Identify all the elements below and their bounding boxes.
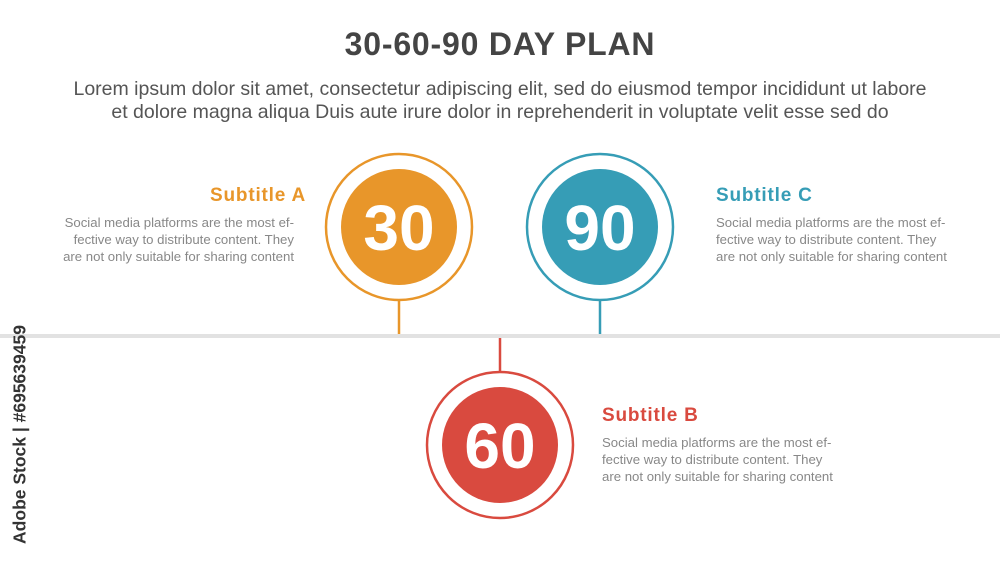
marker 90 <box>527 154 673 334</box>
marker 30: 30 <box>363 192 435 264</box>
panel: subtitle B: Subtitle B <box>602 405 699 426</box>
panel: subtitle C <box>716 185 947 264</box>
watermark id: Adobe Stock | #695639459 <box>10 325 30 544</box>
panel: subtitle A: are not only suitable for sharing content <box>63 249 294 264</box>
intro text: et dolore magna aliqua Duis aute irure dolor in reprehenderit in voluptate velit esse sed do <box>111 101 889 123</box>
panel: subtitle B <box>602 405 833 484</box>
panel: subtitle B: Social media platforms are the most ef- <box>602 435 831 450</box>
intro text <box>73 78 927 123</box>
marker 60 <box>427 338 573 518</box>
marker 90: 90 <box>564 192 636 264</box>
panel: subtitle A: Subtitle A <box>210 185 306 206</box>
panel: subtitle C: fective way to distribute content. They <box>716 232 936 247</box>
marker 30 <box>326 154 472 334</box>
panel: subtitle A: Social media platforms are the most ef- <box>65 215 294 230</box>
panel: subtitle B: fective way to distribute content. They <box>602 452 822 467</box>
panel: subtitle C: Subtitle C <box>716 185 813 206</box>
intro text: Lorem ipsum dolor sit amet, consectetur adipiscing elit, sed do eiusmod tempor incididunt ut labore <box>73 78 927 100</box>
title: 30-60-90 DAY PLAN <box>345 26 655 62</box>
timeline line <box>0 334 1000 338</box>
panel: subtitle C: Social media platforms are the most ef- <box>716 215 945 230</box>
panel: subtitle A <box>63 185 306 264</box>
panel: subtitle C: are not only suitable for sharing content <box>716 249 947 264</box>
marker 60: 60 <box>464 410 536 482</box>
panel: subtitle B: are not only suitable for sharing content <box>602 469 833 484</box>
panel: subtitle A: fective way to distribute content. They <box>74 232 294 247</box>
